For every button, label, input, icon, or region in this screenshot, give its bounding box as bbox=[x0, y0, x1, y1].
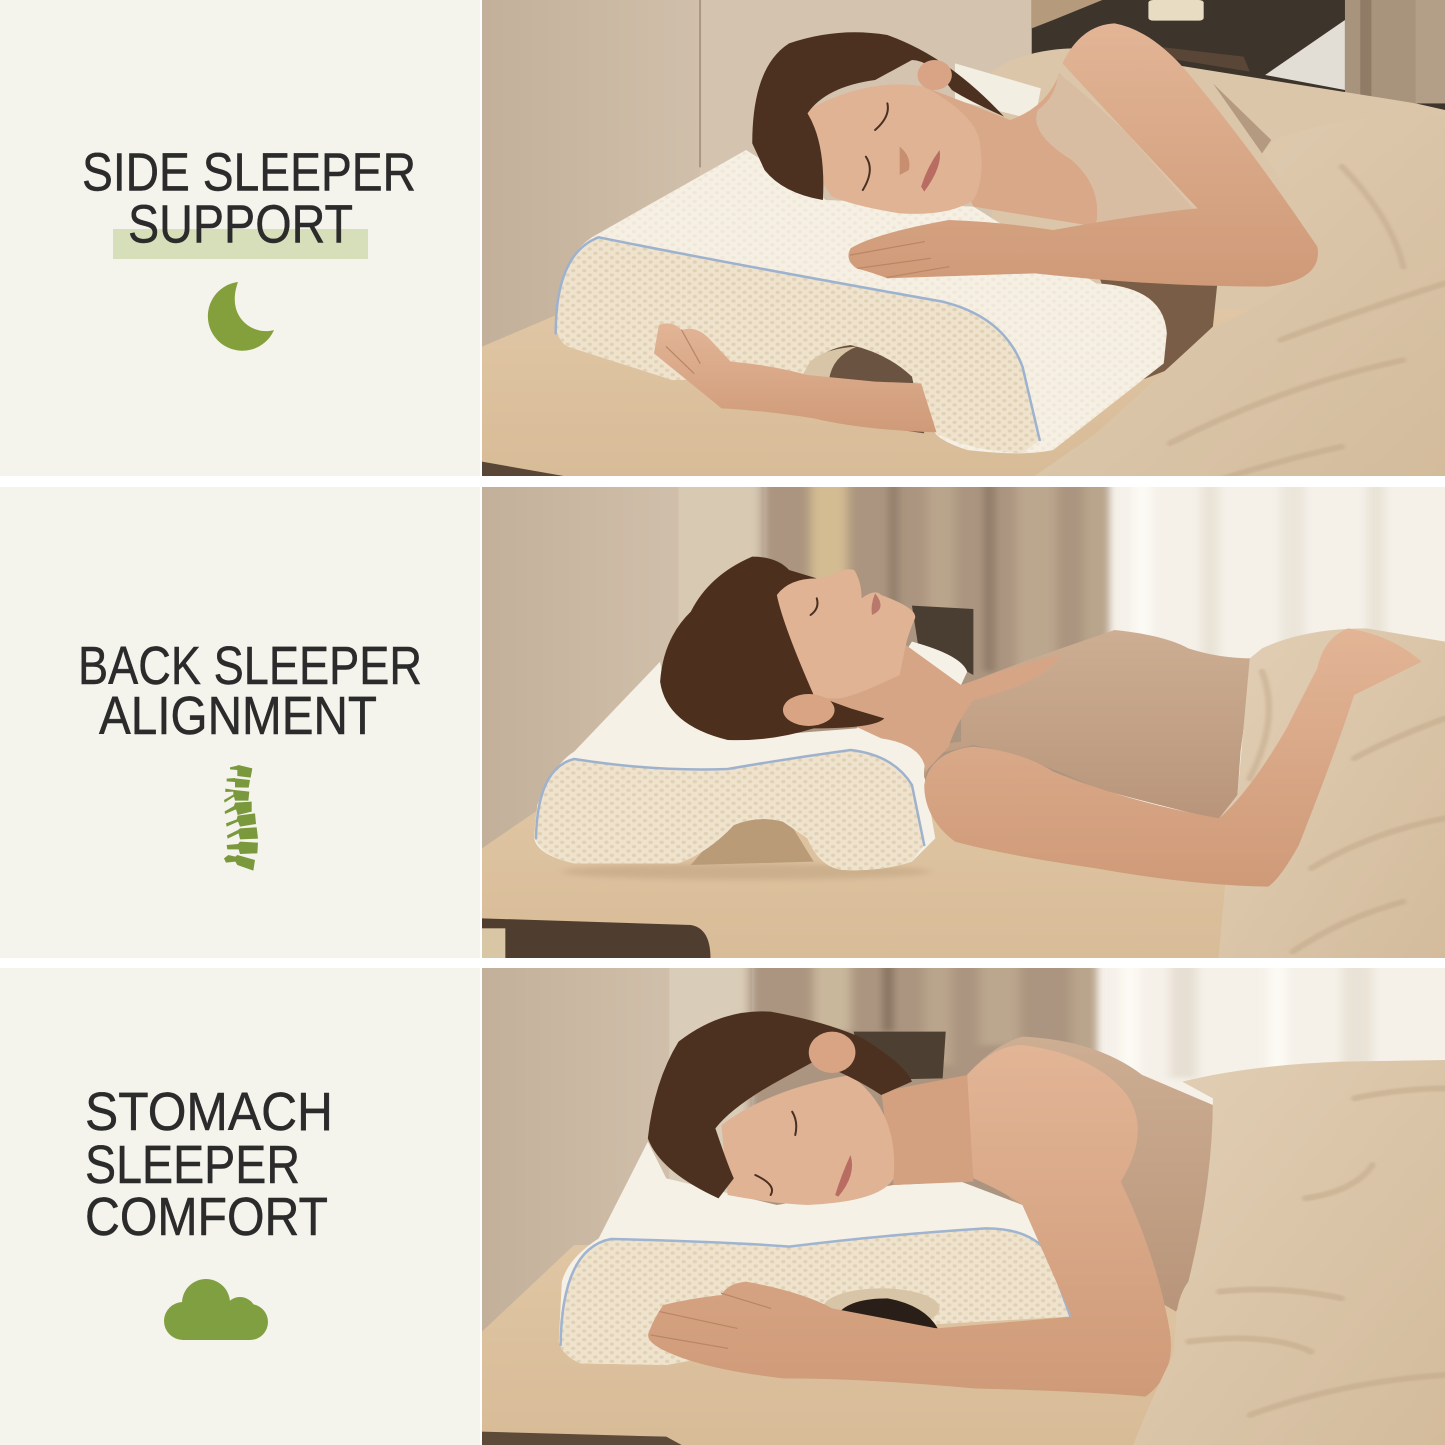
wall bbox=[482, 968, 752, 1332]
window sheer bbox=[1093, 968, 1445, 1105]
blanket bbox=[1133, 1060, 1445, 1445]
heading: stomach sleeper comfort: SLEEPER bbox=[85, 1136, 300, 1195]
icon: crescent moon bbox=[208, 282, 274, 351]
heading: stomach sleeper comfort: COMFORT bbox=[85, 1188, 328, 1247]
blanket bbox=[1218, 628, 1445, 965]
panel: back sleeper text bbox=[0, 487, 480, 958]
mattress bbox=[482, 1245, 1219, 1445]
heading: side sleeper support: SUPPORT bbox=[128, 196, 353, 255]
panel: side sleeper photo bbox=[482, 0, 1445, 480]
mattress bbox=[482, 811, 1226, 958]
pillow bbox=[534, 642, 967, 870]
face and neck bbox=[777, 569, 1059, 772]
heading: back sleeper alignment bbox=[78, 637, 422, 746]
panel: stomach sleeper photo bbox=[482, 952, 1445, 1445]
highlight bar bbox=[113, 229, 368, 259]
window sheer bbox=[1112, 472, 1445, 805]
mattress bbox=[482, 48, 1445, 480]
curtain bbox=[761, 472, 1113, 805]
blanket bbox=[1035, 164, 1445, 476]
face bbox=[808, 84, 982, 214]
panel: back sleeper photo bbox=[482, 472, 1445, 965]
curtain bbox=[744, 968, 1102, 1238]
hair bbox=[752, 32, 1004, 200]
heading: side sleeper support bbox=[82, 144, 416, 255]
arm and hand bbox=[924, 628, 1422, 887]
heading: back sleeper alignment: ALIGNMENT bbox=[99, 687, 377, 746]
camisole bbox=[961, 1037, 1213, 1312]
icon: spine bbox=[224, 765, 258, 871]
heading: side sleeper support: SIDE SLEEPER bbox=[82, 144, 416, 203]
face and neck bbox=[722, 1075, 973, 1205]
curtain bbox=[1345, 0, 1445, 103]
pillow bbox=[559, 1142, 1072, 1365]
upper arm and hand on pillow bbox=[848, 23, 1318, 287]
wall bbox=[482, 487, 764, 848]
arm, shoulder and hand bbox=[648, 1045, 1171, 1397]
nightstand bbox=[854, 1032, 946, 1080]
heading: stomach sleeper comfort: STOMACH bbox=[85, 1083, 333, 1142]
hair bbox=[660, 557, 884, 740]
panel: stomach sleeper text bbox=[0, 968, 480, 1445]
heading: stomach sleeper comfort bbox=[85, 1083, 333, 1247]
body and camisole bbox=[924, 73, 1271, 227]
camisole bbox=[924, 630, 1253, 820]
heading: back sleeper alignment: BACK SLEEPER bbox=[78, 637, 422, 696]
hair bbox=[648, 1011, 912, 1198]
nightstand bbox=[912, 606, 973, 675]
icon: cloud bbox=[164, 1279, 268, 1340]
headboard bbox=[482, 0, 1032, 346]
pillow bbox=[556, 63, 1167, 453]
lower arm and hand bbox=[654, 323, 937, 432]
nightstand bbox=[1032, 0, 1445, 113]
panel: side sleeper text bbox=[0, 0, 480, 476]
